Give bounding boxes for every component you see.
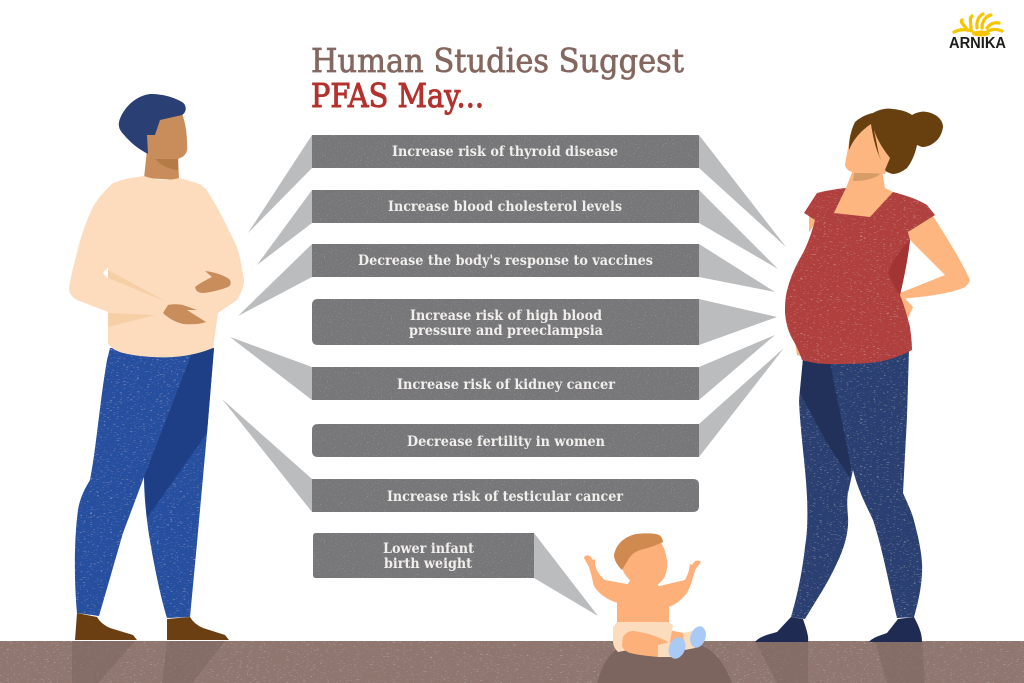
baby diaper bbox=[613, 622, 673, 652]
bar: vaccine response: Decrease the body's response to vaccines bbox=[358, 253, 653, 269]
bar: blood cholesterol bbox=[312, 190, 699, 223]
woman trousers shading bbox=[800, 360, 851, 478]
baby torso bbox=[617, 580, 669, 626]
title: Human Studies Suggest bbox=[311, 41, 684, 80]
bar: blood pressure and preeclampsia: Increase risk of high blood bbox=[410, 308, 603, 324]
figure: woman bbox=[755, 109, 970, 642]
man trousers shading bbox=[144, 348, 214, 518]
baby arms bbox=[584, 555, 701, 610]
bar: vaccine response bbox=[312, 244, 699, 277]
baby far sock bbox=[683, 630, 697, 650]
woman neck and chest bbox=[834, 170, 893, 218]
woman face bbox=[845, 118, 892, 174]
man hair bbox=[119, 94, 186, 154]
baby hair bbox=[614, 533, 663, 570]
baby head bbox=[620, 534, 667, 586]
bar: blood cholesterol: Increase blood cholesterol levels bbox=[388, 199, 622, 215]
man shoes bbox=[75, 613, 229, 640]
man neck shadow bbox=[155, 159, 178, 170]
logo: Arnika bbox=[949, 14, 1006, 52]
baby far leg bbox=[668, 630, 684, 648]
bar: kidney cancer bbox=[312, 367, 699, 400]
woman hand on hip bbox=[900, 293, 913, 318]
baby far foot bbox=[687, 624, 709, 650]
bar: thyroid disease bbox=[312, 135, 699, 168]
bar: fertility bbox=[312, 424, 699, 457]
man sweater bbox=[69, 176, 244, 357]
bar: infant birth weight: Lower infant bbox=[383, 541, 475, 557]
figure: man bbox=[69, 94, 244, 640]
bar: fertility: Decrease fertility in women bbox=[407, 434, 605, 450]
bar: kidney cancer: Increase risk of kidney cancer bbox=[397, 377, 616, 393]
woman trousers bbox=[791, 350, 922, 619]
bar: blood pressure and preeclampsia bbox=[312, 299, 699, 345]
bar: infant birth weight: birth weight bbox=[384, 556, 473, 572]
man face bbox=[145, 113, 187, 159]
figure: baby bbox=[584, 533, 709, 661]
man trousers bbox=[75, 348, 214, 618]
woman arm on hip bbox=[900, 216, 970, 299]
pointer wedges to woman bbox=[699, 135, 786, 457]
logo: Arnika: ARNIKA bbox=[949, 35, 1006, 52]
man sweater folds bbox=[108, 270, 167, 327]
woman shoes bbox=[755, 617, 922, 642]
woman left hand bbox=[795, 340, 804, 357]
bar: infant birth weight bbox=[313, 533, 534, 578]
woman shirt bbox=[785, 188, 935, 364]
baby near foot bbox=[665, 635, 689, 661]
woman neck shadow bbox=[853, 173, 882, 181]
bar: thyroid disease: Increase risk of thyroid disease bbox=[392, 144, 618, 160]
bar: testicular cancer bbox=[312, 479, 699, 512]
man hands bbox=[163, 271, 231, 324]
pointer wedges to man bbox=[222, 135, 312, 512]
baby near sock bbox=[658, 642, 677, 657]
title bbox=[311, 41, 684, 115]
bar: blood pressure and preeclampsia: pressure and preeclampsia bbox=[409, 323, 603, 339]
bar: testicular cancer: Increase risk of testicular cancer bbox=[387, 489, 624, 505]
woman hair bbox=[849, 109, 943, 174]
baby near leg bbox=[622, 631, 670, 657]
title: PFAS May... bbox=[311, 76, 484, 115]
woman shirt shading bbox=[888, 240, 910, 295]
floor bbox=[0, 641, 1024, 683]
pointer wedge to baby bbox=[534, 533, 598, 616]
man arm gap bbox=[103, 267, 108, 279]
woman upper left arm bbox=[809, 216, 818, 232]
man neck bbox=[144, 150, 179, 180]
